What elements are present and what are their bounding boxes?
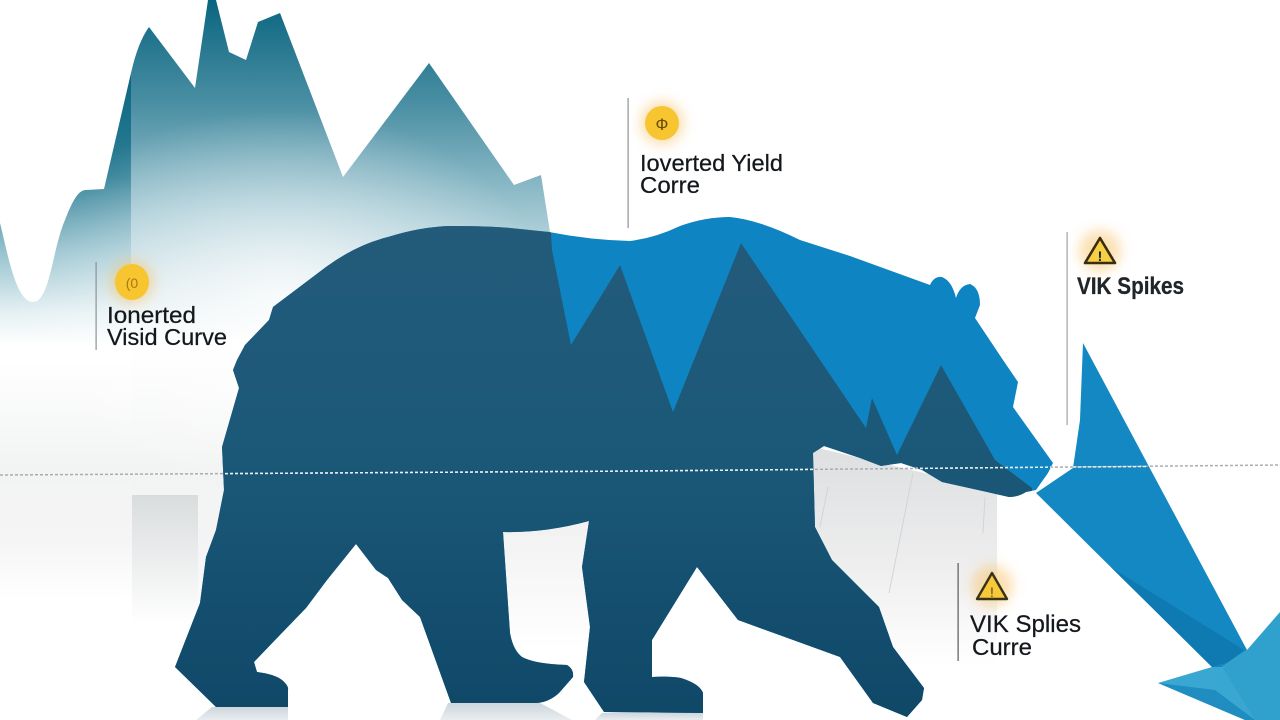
callout: VIX spikes upper	[1066, 230, 1184, 425]
icon: yellow coin: Ф	[656, 115, 668, 134]
callout: left inverted yield curve	[96, 260, 227, 350]
callout: top inverted yield curve: Corre	[640, 172, 700, 198]
callout: VIX spikes curve lower: VIK Splies	[970, 611, 1081, 638]
callout: VIX spikes curve lower: Curre	[972, 634, 1032, 660]
icon: warning triangle: !	[990, 584, 994, 600]
icon: warning triangle: !	[1098, 248, 1102, 264]
callout: top inverted yield curve: Ioverted Yield	[640, 150, 783, 176]
background gray panels	[0, 340, 997, 665]
bear silhouette	[170, 200, 1070, 720]
callout: left inverted yield curve: Ionerted	[107, 302, 196, 328]
icon: yellow coin	[640, 101, 684, 145]
downward arrow	[1036, 343, 1280, 720]
callout: VIX spikes upper: VIK Spikes	[1077, 273, 1184, 300]
foot shadows	[196, 703, 703, 720]
callout: VIX spikes curve lower	[958, 563, 1081, 661]
dotted threshold line	[0, 465, 1280, 475]
background mountain area chart	[0, 0, 550, 490]
icon: warning triangle	[1079, 230, 1121, 272]
icon: yellow coin: (0	[126, 275, 138, 291]
callout: left inverted yield curve: Visid Curve	[107, 324, 227, 350]
callout: top inverted yield curve	[628, 98, 783, 228]
